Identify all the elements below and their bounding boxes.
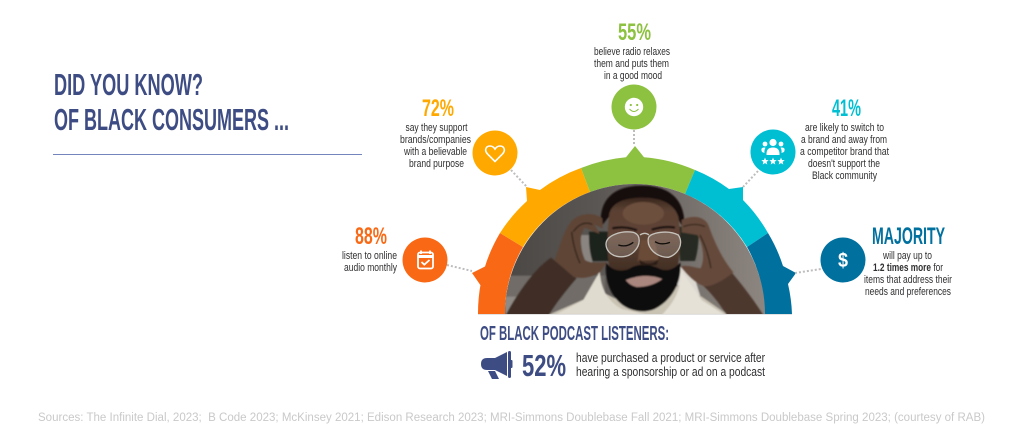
title: DID YOU KNOW? xyxy=(54,68,203,102)
connector: teal xyxy=(743,171,758,187)
stat: 72%: say they support xyxy=(406,122,468,134)
stat: 55% xyxy=(594,19,670,82)
stat: majority: 1.2 times more for xyxy=(873,262,943,274)
photo: man wearing headphones xyxy=(505,184,765,315)
face xyxy=(607,198,680,278)
right hand xyxy=(681,217,733,286)
stat: 72%: with a believable xyxy=(403,146,467,158)
stat: majority: items that address their xyxy=(864,274,952,286)
icon: heart xyxy=(472,130,518,176)
stat: 88%: listen to online xyxy=(342,250,397,262)
stat: 41%: a brand and away from xyxy=(801,134,887,146)
stat: majority: MAJORITY xyxy=(872,223,945,250)
icon: dollar sign xyxy=(820,238,866,282)
podcast description: have purchased a product or service after xyxy=(576,350,766,365)
stat: 88% xyxy=(342,223,397,274)
stat: 88%: audio monthly xyxy=(344,262,397,274)
stat: 41%: Black community xyxy=(812,170,877,182)
stat: 72%: 72% xyxy=(422,95,454,122)
beard xyxy=(606,262,681,311)
icon: dollar sign: $ xyxy=(838,250,848,272)
stat: 88%: 88% xyxy=(355,223,387,250)
lips xyxy=(626,276,662,287)
semicircle segment: green xyxy=(581,146,695,194)
connector: green xyxy=(633,130,635,146)
stat: majority xyxy=(864,223,952,298)
title: OF BLACK CONSUMERS ... xyxy=(54,103,289,137)
hair xyxy=(601,186,685,230)
headphones xyxy=(589,232,609,261)
stat: 72%: brand purpose xyxy=(409,158,464,170)
stat: 41%: are likely to switch to xyxy=(805,122,884,134)
stat: 41%: a competitor brand that xyxy=(800,146,889,158)
couch xyxy=(505,276,605,315)
semicircle segment: orange xyxy=(472,233,523,314)
icon: megaphone xyxy=(481,351,512,379)
stat: 55%: 55% xyxy=(618,19,651,46)
nose xyxy=(638,240,659,261)
stat: 55%: them and puts them xyxy=(594,58,669,70)
semicircle segment: teal xyxy=(685,170,768,247)
podcast heading: OF BLACK PODCAST LISTENERS: xyxy=(480,322,669,345)
semicircle segment: blue xyxy=(747,233,796,314)
left hand xyxy=(554,214,607,278)
icon: calendar check xyxy=(402,238,448,282)
stat: 55%: believe radio relaxes xyxy=(594,46,670,58)
right arm xyxy=(702,272,763,315)
podcast description: hearing a sponsorship or ad on a podcast xyxy=(576,364,765,379)
stat: 52%: 52% xyxy=(522,349,566,383)
title xyxy=(54,68,289,137)
glasses xyxy=(606,232,681,257)
semicircle segment: yellow xyxy=(500,168,590,247)
forehead highlight xyxy=(623,202,664,225)
connector: orange xyxy=(447,265,472,271)
connector: blue xyxy=(795,269,821,273)
stat: 41%: doesn't support the xyxy=(808,158,880,170)
sources: Sources: The Infinite Dial, 2023; B Code 2023; McKinsey 2021; Edison Research 2023; MRI-Simmons Doublebase Fall 2021; MRI-Simmons Doublebase Spring 2023; (courtesy of RAB) xyxy=(38,412,985,424)
connector: yellow xyxy=(511,170,527,187)
stat: 72%: brands/companies xyxy=(400,134,471,146)
stat: majority: will pay up to xyxy=(882,250,932,262)
stat: 55%: in a good mood xyxy=(604,70,662,82)
stat: majority: needs and preferences xyxy=(865,286,951,298)
left arm xyxy=(506,258,577,315)
stat: 41%: 41% xyxy=(832,95,861,122)
icon: smiley face xyxy=(612,84,656,130)
stat: 72% xyxy=(400,95,471,170)
podcast description xyxy=(576,350,766,379)
brows xyxy=(612,227,675,230)
sweater xyxy=(548,285,728,315)
stat: 41% xyxy=(800,95,889,182)
icon: community with stars xyxy=(750,130,796,174)
